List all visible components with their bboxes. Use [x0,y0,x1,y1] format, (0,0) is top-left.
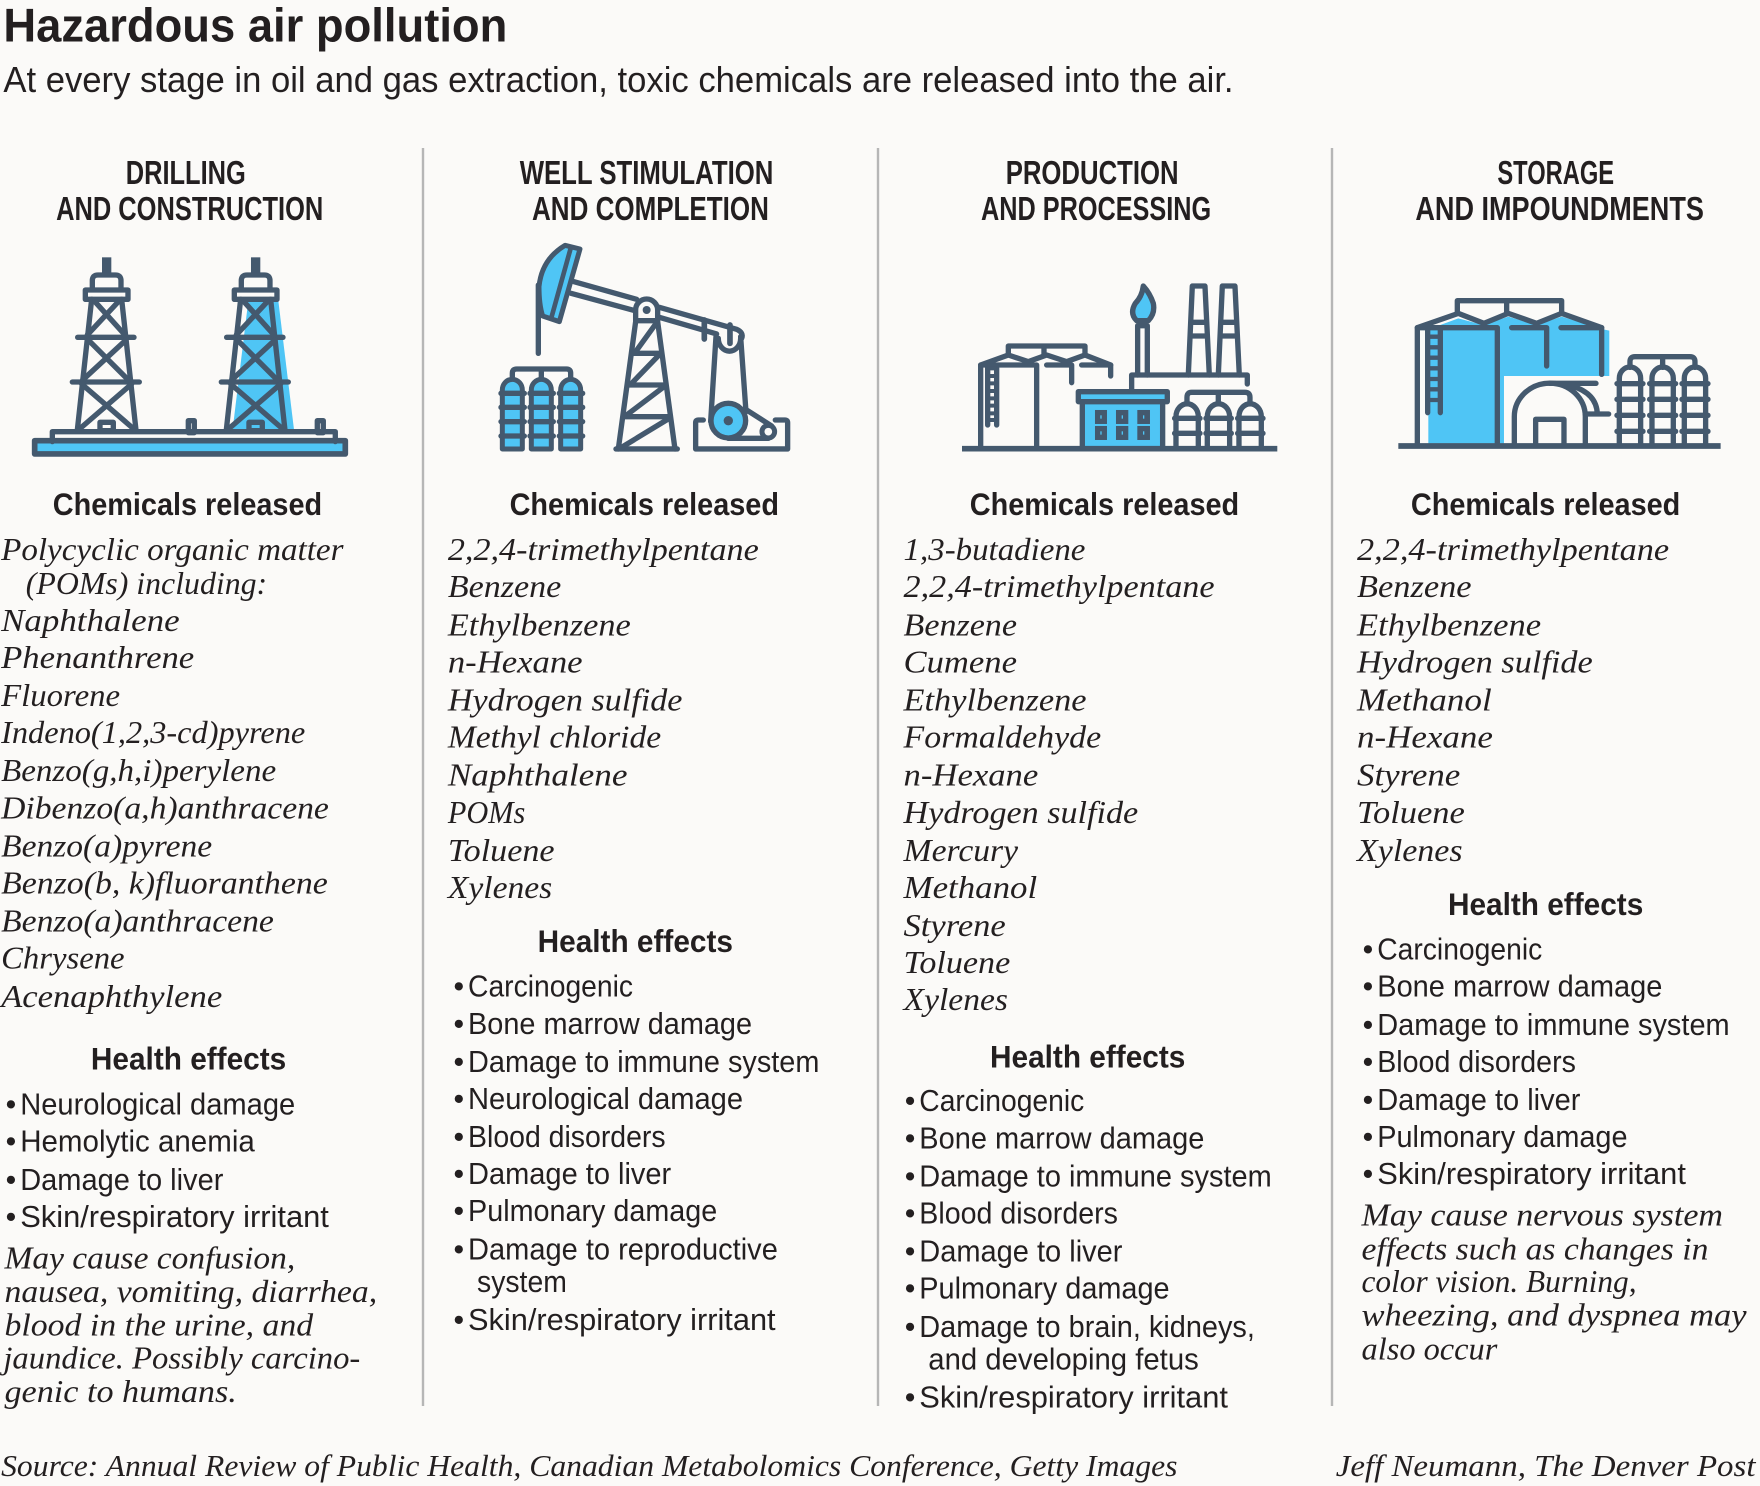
chemicals list: production: Formaldehyde [902,720,1101,755]
note: drilling: blood in the urine, and [4,1308,313,1343]
chemicals list: well stimulation [446,487,779,905]
health effects: drilling: • [6,1201,16,1234]
health effects: drilling: • [6,1089,16,1122]
health effects: well stimulation: Blood disorders [468,1121,666,1154]
health effects: storage: Damage to immune system [1377,1009,1730,1042]
health effects: production: • [905,1382,915,1415]
health effects: production: Carcinogenic [919,1085,1084,1118]
title: Hazardous air pollution [3,0,507,52]
health effects: storage: Health effects [1448,887,1643,922]
health effects: storage: Skin/respiratory irritant [1377,1158,1687,1191]
health effects: production: • [905,1085,915,1118]
health effects: production: • [905,1236,915,1269]
chemicals list: drilling: Benzo(a)anthracene [1,904,274,939]
health effects: production: • [905,1311,915,1344]
health effects: production: Skin/respiratory irritant [919,1382,1229,1415]
chemicals list: well stimulation: Benzene [448,569,561,604]
chemicals list: drilling [0,487,344,1014]
note: drilling: genic to humans. [4,1374,237,1409]
chemicals list: production: 1,3-butadiene [904,532,1085,567]
chemicals list: storage: Methanol [1356,683,1492,718]
chemicals list: production: 2,2,4-trimethylpentane [904,569,1215,604]
health effects: well stimulation: Bone marrow damage [468,1008,752,1041]
health effects: production: Damage to immune system [919,1160,1272,1193]
heading: production: PRODUCTION [1006,155,1179,192]
panel: production and processing [901,155,1272,1415]
panel: well stimulation and completion [446,155,819,1337]
icon: processing plant [962,286,1277,449]
heading: well stimulation: WELL STIMULATION [520,155,773,192]
source line: Source: Annual Review of Public Health, Canadian Metabolomics Conference, Getty Images [1,1449,1177,1483]
chemicals list: production: n-Hexane [904,758,1038,793]
chemicals list: storage: Toluene [1357,795,1465,830]
heading: drilling: DRILLING [126,155,246,192]
health effects: storage [1363,887,1730,1191]
chemicals list: well stimulation: Chemicals released [510,487,779,522]
health effects: storage: Pulmonary damage [1377,1121,1628,1154]
chemicals list: production: Benzene [904,607,1017,642]
health effects: storage: • [1363,1121,1373,1154]
note: storage: also occur [1362,1331,1498,1366]
chemicals list: storage: Xylenes [1355,833,1463,868]
health effects: storage: • [1363,1009,1373,1042]
note: drilling: jaundice. Possibly carcino- [0,1340,360,1375]
heading: storage: STORAGE [1497,155,1614,192]
health effects: production: Bone marrow damage [919,1122,1204,1155]
health effects: production: Damage to liver [919,1236,1122,1269]
health effects: well stimulation: • [453,1083,464,1116]
chemicals list: well stimulation: n-Hexane [448,644,583,679]
health effects: well stimulation: Health effects [538,924,733,959]
health effects: production [905,1039,1272,1415]
health effects: storage: Bone marrow damage [1377,971,1662,1004]
note: storage [1360,1198,1747,1366]
chemicals list: drilling: Fluorene [0,678,120,713]
health effects: production: and developing fetus [928,1343,1199,1376]
health effects: well stimulation: Carcinogenic [468,971,633,1004]
health effects: well stimulation: Damage to reproductive [468,1233,778,1266]
health effects: production: Health effects [990,1039,1185,1074]
icon: drilling rigs [35,257,345,454]
health effects: drilling: Health effects [91,1042,286,1077]
health effects: well stimulation: • [453,1121,464,1154]
health effects: storage: • [1363,971,1373,1004]
health effects: storage: • [1363,934,1373,967]
health effects: storage: • [1363,1084,1373,1117]
panel: storage and impoundments [1355,155,1747,1366]
chemicals list: well stimulation: Naphthalene [447,758,628,793]
chemicals list: drilling: Acenaphthylene [0,979,222,1014]
health effects: production: Pulmonary damage [919,1273,1170,1306]
chemicals list: drilling: Phenanthrene [0,640,194,675]
health effects: drilling: Damage to liver [20,1164,223,1197]
icon: pump jack and tanks [501,245,788,449]
health effects: production: Damage to brain, kidneys, [919,1311,1255,1344]
health effects: well stimulation: • [453,1195,464,1228]
chemicals list: production: Cumene [904,644,1017,679]
health effects: well stimulation [453,924,819,1337]
chemicals list: drilling: Benzo(a)pyrene [1,828,212,863]
heading: storage [1415,155,1704,228]
heading: drilling: AND CONSTRUCTION [56,191,323,228]
heading: drilling [56,155,323,228]
chemicals list: storage: Benzene [1357,569,1472,604]
health effects: well stimulation: • [453,1233,464,1266]
health effects: well stimulation: Neurological damage [468,1083,743,1116]
chemicals list: storage [1355,487,1680,868]
chemicals list: drilling: Naphthalene [0,603,180,638]
health effects: storage: • [1363,1158,1373,1191]
health effects: well stimulation: • [453,971,464,1004]
health effects: production: • [905,1197,915,1230]
chemicals list: production: Xylenes [901,982,1008,1017]
chemicals list: storage: Hydrogen sulfide [1356,644,1593,679]
health effects: storage: Blood disorders [1377,1046,1576,1079]
health effects: well stimulation: • [453,1304,464,1337]
heading: production [981,155,1211,228]
health effects: well stimulation: • [453,1008,464,1041]
chemicals list: drilling: Polycyclic organic matter [0,532,344,567]
note: storage: color vision. Burning, [1362,1264,1637,1299]
health effects: drilling: Neurological damage [20,1089,295,1122]
icon: storage tanks [1398,301,1721,446]
chemicals list: drilling: Chemicals released [53,487,322,522]
health effects: well stimulation: Damage to liver [468,1158,671,1191]
health effects: drilling: Hemolytic anemia [20,1126,255,1159]
health effects: well stimulation: Damage to immune system [468,1046,819,1079]
chemicals list: production: Ethylbenzene [902,683,1087,718]
chemicals list: well stimulation: Hydrogen sulfide [447,683,683,718]
chemicals list: drilling: Chrysene [1,941,125,976]
health effects: production: • [905,1122,915,1155]
note: storage: May cause nervous system [1360,1198,1723,1233]
chemicals list: well stimulation: Toluene [448,833,555,868]
health effects: storage: • [1363,1046,1373,1079]
chemicals list: well stimulation: 2,2,4-trimethylpentane [448,532,759,567]
chemicals list: drilling: Benzo(b, k)fluoranthene [1,865,328,900]
credit line: Jeff Neumann, The Denver Post [1336,1449,1757,1483]
health effects: drilling [6,1042,329,1234]
heading: well stimulation [520,155,773,228]
chemicals list: well stimulation: Methyl chloride [447,720,661,755]
chemicals list: production: Chemicals released [970,487,1239,522]
subtitle: At every stage in oil and gas extraction, toxic chemicals are released into the air. [3,59,1234,100]
chemicals list: production: Hydrogen sulfide [902,795,1138,830]
chemicals list: storage: 2,2,4-trimethylpentane [1357,532,1669,567]
chemicals list: drilling: Benzo(g,h,i)perylene [1,753,276,788]
health effects: production: • [905,1273,915,1306]
health effects: drilling: • [6,1164,16,1197]
note: drilling: May cause confusion, [3,1240,295,1275]
chemicals list: well stimulation: POMs [447,795,525,830]
health effects: well stimulation: system [477,1266,567,1299]
chemicals list: production: Styrene [904,908,1006,943]
health effects: production: Blood disorders [919,1197,1118,1230]
chemicals list: production: Methanol [902,870,1037,905]
health effects: well stimulation: Pulmonary damage [468,1195,717,1228]
chemicals list: drilling: Dibenzo(a,h)anthracene [0,790,329,825]
chemicals list: storage: Chemicals released [1411,487,1680,522]
health effects: production: • [905,1160,915,1193]
chemicals list: storage: n-Hexane [1357,720,1493,755]
health effects: well stimulation: • [453,1158,464,1191]
chemicals list: well stimulation: Ethylbenzene [447,607,631,642]
note: storage: effects such as changes in [1362,1231,1708,1266]
chemicals list: production: Toluene [904,945,1010,980]
panel: drilling and construction [0,155,377,1409]
chemicals list: production [901,487,1239,1017]
health effects: drilling: • [6,1126,16,1159]
note: storage: wheezing, and dyspnea may [1362,1298,1747,1333]
health effects: drilling: Skin/respiratory irritant [20,1201,329,1234]
note: drilling: nausea, vomiting, diarrhea, [4,1274,377,1309]
health effects: storage: Damage to liver [1377,1084,1580,1117]
health effects: well stimulation: Skin/respiratory irritant [468,1304,776,1337]
chemicals list: drilling: Indeno(1,2,3-cd)pyrene [0,715,305,750]
health effects: storage: Carcinogenic [1377,934,1542,967]
heading: production: AND PROCESSING [981,191,1211,228]
chemicals list: well stimulation: Xylenes [446,870,552,905]
health effects: well stimulation: • [453,1046,464,1079]
chemicals list: production: Mercury [903,833,1018,868]
chemicals list: storage: Styrene [1357,758,1460,793]
note: drilling [0,1240,377,1409]
heading: well stimulation: AND COMPLETION [532,191,769,228]
chemicals list: storage: Ethylbenzene [1356,607,1541,642]
chemicals list: drilling: (POMs) including: [26,566,267,601]
